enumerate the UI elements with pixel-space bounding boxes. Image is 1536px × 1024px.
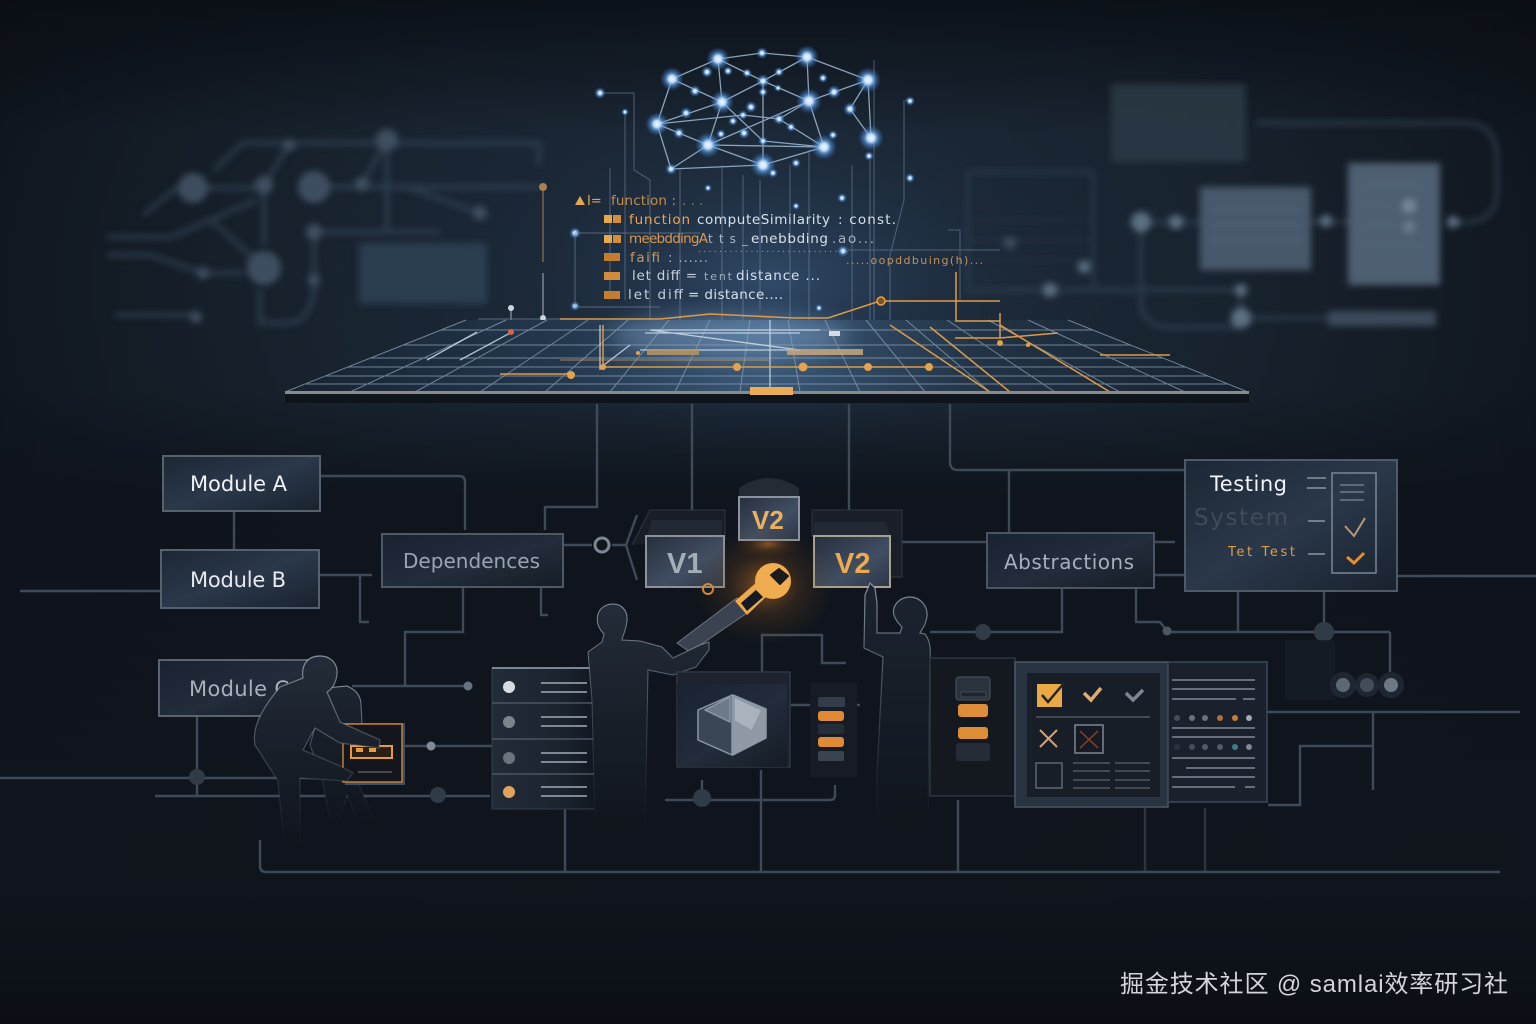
tool handle xyxy=(677,598,747,652)
bright grid highlights xyxy=(427,320,820,392)
icon: crossed box xyxy=(1075,725,1103,753)
vertical traces below the network xyxy=(600,60,1000,320)
code line 3: enebbding xyxy=(751,231,828,247)
label: System: System xyxy=(1194,505,1288,531)
code line 1 xyxy=(575,193,703,209)
AI neural network xyxy=(569,45,1000,320)
code bracket box xyxy=(575,233,700,307)
version box: V1: V1 xyxy=(667,548,702,580)
code line 2 xyxy=(604,212,896,228)
small chip rows xyxy=(647,331,863,355)
watermark: 掘金技术社区 @ samlai效率研习社 xyxy=(1120,971,1508,998)
panel: log list xyxy=(1168,662,1267,802)
code line 4: : ...... xyxy=(668,250,708,266)
code line 4: .....oopddbuing(h)... xyxy=(846,254,983,267)
checklist icon xyxy=(1332,473,1376,573)
panel: small orange terminal xyxy=(343,723,405,785)
icon: cross xyxy=(1040,730,1057,747)
rack lines xyxy=(541,683,587,796)
version box: V2 top xyxy=(734,478,802,558)
label: Tet Test: Tet Test xyxy=(1227,545,1295,560)
code line 2: function xyxy=(629,212,690,228)
icon: polyhedron xyxy=(698,695,766,755)
icon: check marks xyxy=(1084,688,1143,700)
panel: Module A xyxy=(163,456,320,511)
code line 1: . . . xyxy=(682,193,703,209)
panel: Module B: Module B xyxy=(190,568,286,592)
connector nodes xyxy=(189,538,1334,807)
empty box xyxy=(1036,763,1062,788)
code line 4 xyxy=(604,245,983,267)
code line 2: : const. xyxy=(838,212,896,228)
panel: Module B xyxy=(161,550,319,608)
panel: Dependences: Dependences xyxy=(403,549,540,573)
code line 2: computeSimilarity xyxy=(697,212,830,228)
panel: Abstractions xyxy=(987,533,1154,588)
wrench tool glow xyxy=(695,525,835,645)
code line 3: .ao... xyxy=(832,231,874,247)
code line 5: distance ... xyxy=(736,268,820,284)
small nodes xyxy=(569,47,915,312)
large nodes xyxy=(645,45,884,178)
holographic grid platform xyxy=(285,272,1249,403)
panel: Dependences xyxy=(382,534,563,587)
code line 6: = distance.... xyxy=(688,287,783,303)
network links xyxy=(657,53,871,169)
person: centre figure xyxy=(588,604,709,830)
person: right figure xyxy=(864,583,930,825)
code line 4: ............................. xyxy=(698,245,848,255)
orange nodes on grid xyxy=(508,297,1030,379)
faded circuit diagram left xyxy=(107,129,543,323)
version box: V1 xyxy=(632,510,725,594)
code line 1: function : xyxy=(611,193,676,209)
version box: V2 top: V2 xyxy=(752,505,784,535)
code line 3 xyxy=(604,231,874,247)
faded circuit diagram right xyxy=(968,84,1497,328)
three status circles xyxy=(1285,640,1404,700)
status dots xyxy=(1174,715,1252,750)
version box: V2 right: V2 xyxy=(835,548,870,580)
code line 3: tts_ xyxy=(708,232,749,246)
heading: Testing: Testing xyxy=(1209,472,1287,496)
orange traces xyxy=(500,272,1170,392)
version box: V2 right xyxy=(812,510,902,587)
panel: Abstractions: Abstractions xyxy=(1004,550,1134,574)
code line 5 xyxy=(604,268,820,284)
code line 3: meebddingA xyxy=(629,231,709,247)
panel: Testing System xyxy=(1185,460,1397,591)
code line 4: faifi xyxy=(630,250,660,266)
connector lines xyxy=(0,404,1536,872)
code line 5: tent xyxy=(704,270,733,283)
code line 6: let diff xyxy=(628,287,684,303)
person: left back figure xyxy=(310,686,385,826)
code line 1: I= xyxy=(587,194,602,209)
panel: right server stack xyxy=(930,658,1015,796)
code block xyxy=(575,193,983,303)
platform front edge xyxy=(285,391,1249,394)
icon: checked box xyxy=(1037,683,1064,707)
code line 6 xyxy=(604,287,783,303)
panel: server rack xyxy=(492,668,598,809)
panel: Module C xyxy=(159,660,324,716)
icon: wrench xyxy=(735,563,791,615)
panel: Module A: Module A xyxy=(190,472,288,496)
panel: Module C: Module C xyxy=(189,677,289,701)
person: left front crouching figure xyxy=(254,656,380,847)
panel: small server stack xyxy=(810,683,857,777)
panel: checklist xyxy=(1015,662,1168,807)
grid lines xyxy=(285,320,1248,392)
orange connector xyxy=(750,387,793,395)
left side traces xyxy=(478,183,575,332)
dash marks xyxy=(1307,478,1326,554)
status lights xyxy=(503,681,515,798)
panel: 3D cube card xyxy=(677,672,790,767)
code line 5: let diff = xyxy=(632,268,697,284)
